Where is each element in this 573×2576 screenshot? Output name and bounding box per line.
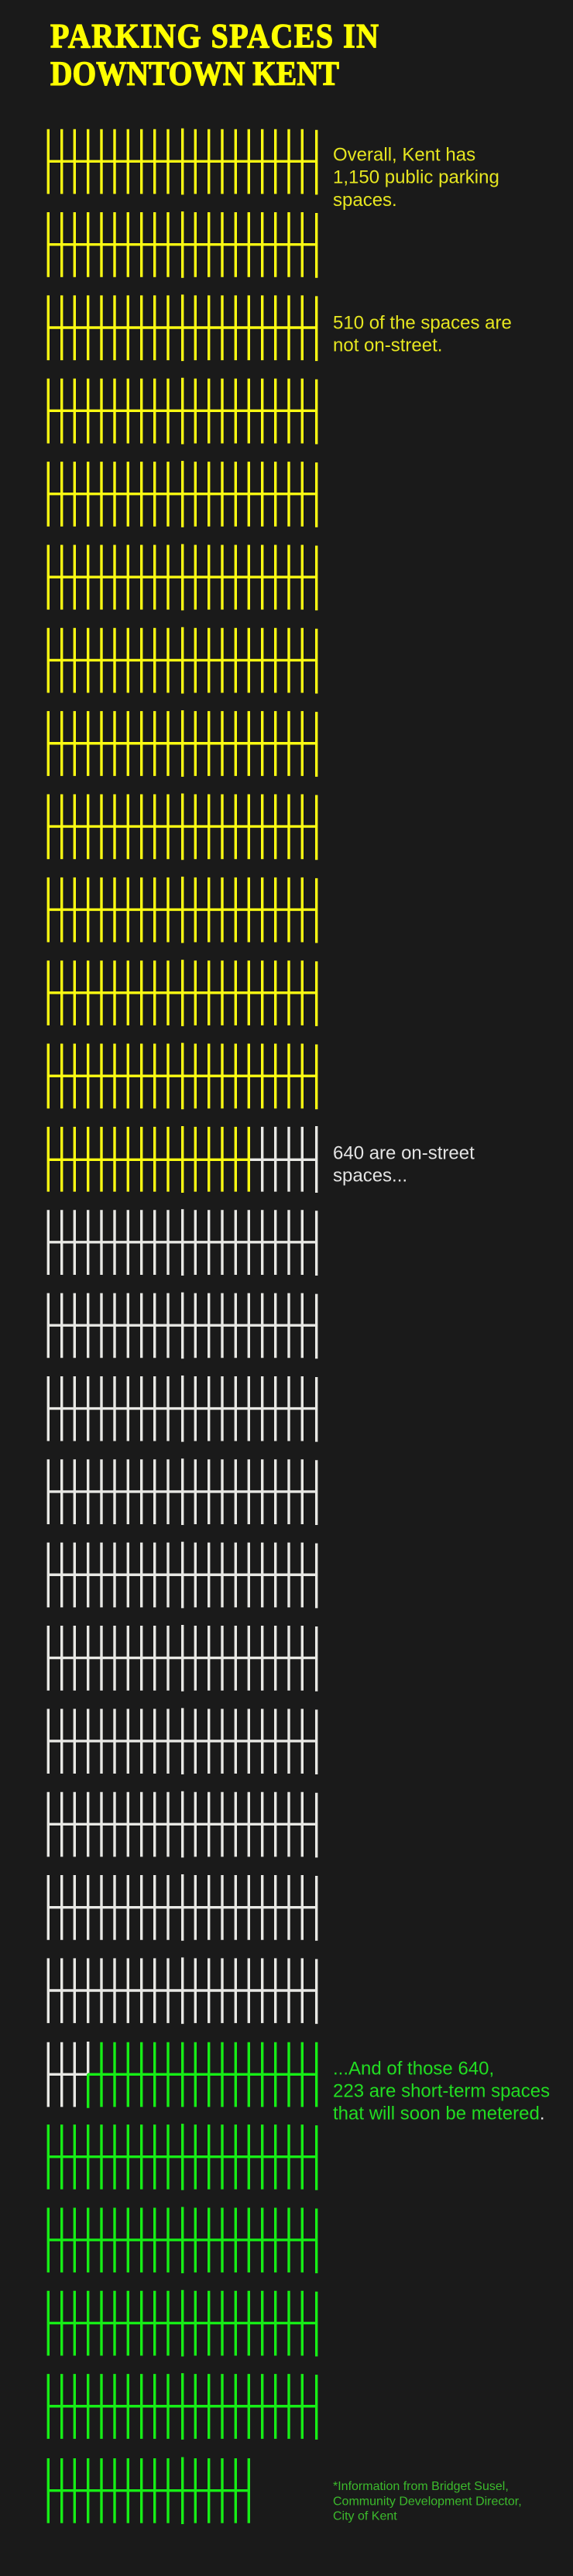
- text: on-street count: 640 are on-street: [333, 1143, 475, 1164]
- text: overall total: Overall, Kent has: [333, 145, 475, 166]
- text: short-term count: ...And of those 640,: [333, 2058, 494, 2079]
- source note: Community Development Director,: [333, 2495, 522, 2508]
- title: PARKING SPACES IN: [50, 17, 379, 56]
- source note: [333, 2480, 522, 2523]
- text: short-term count: that will soon be metered.: [333, 2104, 544, 2124]
- source note: *Information from Bridget Susel,: [333, 2480, 509, 2493]
- final partial green row: [47, 2457, 249, 2524]
- text: on-street count: spaces...: [333, 1166, 407, 1187]
- text: off-street count: 510 of the spaces are: [333, 312, 512, 333]
- text: overall total: [333, 145, 499, 211]
- text: off-street count: not on-street.: [333, 335, 442, 355]
- title: DOWNTOWN KENT: [50, 54, 339, 93]
- yellow parking rows: off-street spaces: [47, 129, 317, 1109]
- transition row: yellow to white: [47, 1126, 317, 1193]
- title: [50, 17, 379, 93]
- source note: City of Kent: [333, 2510, 397, 2523]
- transition row: white to green: [47, 2042, 317, 2108]
- text: overall total: 1,150 public parking: [333, 167, 499, 188]
- text: short-term count: 223 are short-term spaces: [333, 2081, 550, 2102]
- text: on-street count: [333, 1143, 475, 1187]
- green parking rows: short-term spaces: [47, 2124, 317, 2440]
- text: overall total: spaces.: [333, 190, 397, 211]
- text: off-street count: [333, 312, 512, 355]
- white parking rows: on-street spaces: [47, 1209, 317, 2024]
- text: short-term count: [333, 2058, 550, 2124]
